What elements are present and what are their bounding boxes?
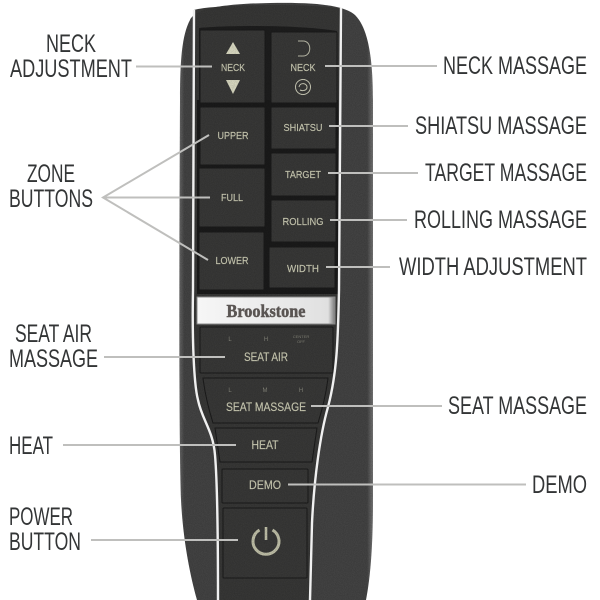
top band shadow <box>199 26 337 106</box>
label: power button <box>9 503 238 556</box>
button: power <box>223 508 307 578</box>
label: zone buttons: ZONE <box>27 160 75 188</box>
button: neck massage: NECK <box>290 62 316 74</box>
label: seat air massage: MASSAGE <box>9 345 98 373</box>
button: target <box>271 153 336 196</box>
label: seat air massage <box>9 320 225 373</box>
button matrix background <box>197 100 338 294</box>
button: seat air <box>200 327 333 373</box>
label: neck adjustment <box>10 30 212 83</box>
button: width <box>269 247 335 288</box>
remote body <box>179 3 373 600</box>
button: seat massage: H <box>299 388 303 394</box>
chrome trim: right <box>310 8 341 600</box>
button: heat <box>215 428 317 462</box>
button: shiatsu <box>271 107 336 149</box>
label: neck adjustment: ADJUSTMENT <box>10 55 132 83</box>
remote control <box>178 0 375 600</box>
button: shiatsu: SHIATSU <box>284 122 322 134</box>
label: zone buttons: BUTTONS <box>9 185 93 213</box>
button: target: TARGET <box>285 169 321 181</box>
button: seat massage: M <box>262 388 268 394</box>
label: zone buttons <box>9 135 210 260</box>
button: upper: UPPER <box>218 130 249 142</box>
label: seat air massage: SEAT AIR <box>15 320 92 348</box>
button: seat air: OFF <box>297 339 306 344</box>
button: neck massage <box>271 32 337 103</box>
button: seat massage <box>203 378 328 423</box>
button: lower: LOWER <box>216 255 249 267</box>
button: heat: HEAT <box>252 438 279 452</box>
label: power button: POWER <box>9 503 73 531</box>
brand plate: Brookstone <box>226 301 306 321</box>
button: full: FULL <box>221 192 243 204</box>
button: seat air: SEAT AIR <box>244 350 288 364</box>
button: neck adjustment <box>200 30 265 103</box>
button: width: WIDTH <box>287 263 319 275</box>
button: upper <box>200 107 265 165</box>
button: demo <box>222 469 308 503</box>
button: lower <box>199 232 264 290</box>
button: full <box>199 168 265 227</box>
button: seat air: CENTER <box>293 334 309 339</box>
button: seat air: H <box>264 337 268 343</box>
button: seat air: L <box>228 337 232 343</box>
button: rolling: ROLLING <box>282 216 324 228</box>
button: seat massage: L <box>228 388 232 394</box>
button: rolling <box>271 200 336 242</box>
label: neck adjustment: NECK <box>46 30 96 58</box>
label: heat: HEAT <box>9 432 53 460</box>
chrome trim: left <box>193 10 218 600</box>
button: seat massage: SEAT MASSAGE <box>226 400 306 414</box>
button: demo: DEMO <box>249 478 281 492</box>
button: neck adjustment: NECK <box>221 62 245 74</box>
brand plate <box>197 297 335 324</box>
centre panel <box>192 5 341 600</box>
label: power button: BUTTON <box>9 528 81 556</box>
